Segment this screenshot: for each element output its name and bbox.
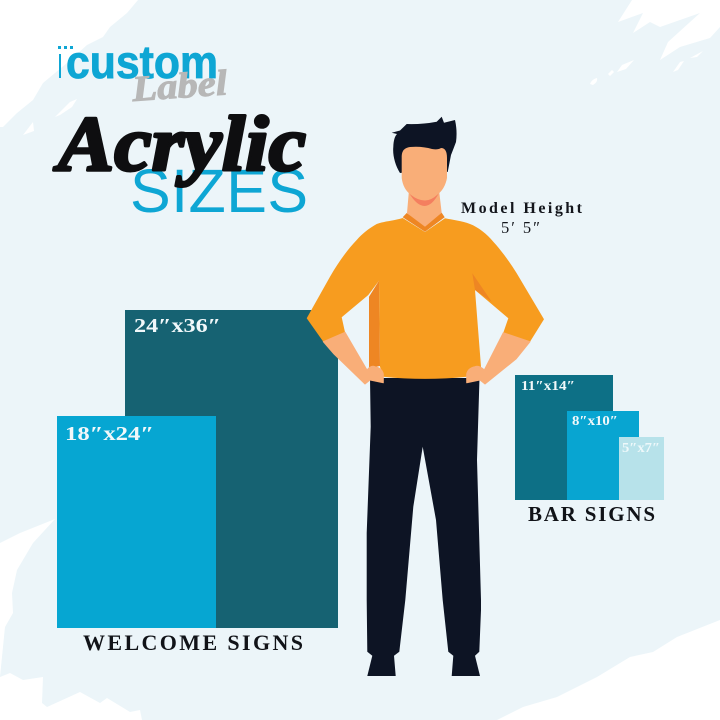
panel: bar signs: [515, 375, 664, 526]
title: [53, 100, 308, 225]
sign: 11x14: 11″x14″: [521, 379, 575, 394]
label: model height: Model Height: [461, 200, 583, 217]
sign: 24x36: [125, 310, 338, 628]
title word: acrylic: Acrylic: [53, 100, 306, 187]
heading: bar signs: BAR SIGNS: [528, 502, 655, 526]
sign: 8x10: [567, 411, 639, 500]
logo word: custom: custom: [66, 36, 218, 88]
sign: 5x7: [619, 437, 664, 500]
logo dots and bar: [58, 46, 73, 78]
model height label: [461, 200, 583, 237]
sign: 11x14: [515, 375, 613, 500]
sweater: [307, 218, 544, 379]
logo: custom label: [58, 36, 228, 109]
sign: 24x36: 24″x36″: [134, 315, 221, 337]
sign: 5x7: 5″x7″: [622, 441, 660, 456]
sweater shadow: [369, 273, 492, 368]
hair: [392, 117, 457, 173]
collar: [403, 213, 445, 232]
sign: 8x10: 8″x10″: [572, 414, 618, 429]
panel: welcome signs: [57, 310, 338, 655]
model figure: [307, 117, 544, 676]
face: [402, 147, 447, 200]
title word: sizes: SIZES: [130, 157, 308, 225]
logo word: label: Label: [130, 62, 228, 109]
sign: 18x24: [57, 416, 216, 628]
heading: welcome signs: WELCOME SIGNS: [83, 630, 303, 655]
forearms and hands: [323, 332, 530, 384]
chin shadow: [409, 193, 439, 206]
trousers and shoes: [367, 378, 481, 676]
sign: 18x24: 18″x24″: [65, 423, 154, 445]
value: 5 ft 5 in: 5′ 5″: [501, 218, 540, 237]
neck: [407, 190, 442, 230]
